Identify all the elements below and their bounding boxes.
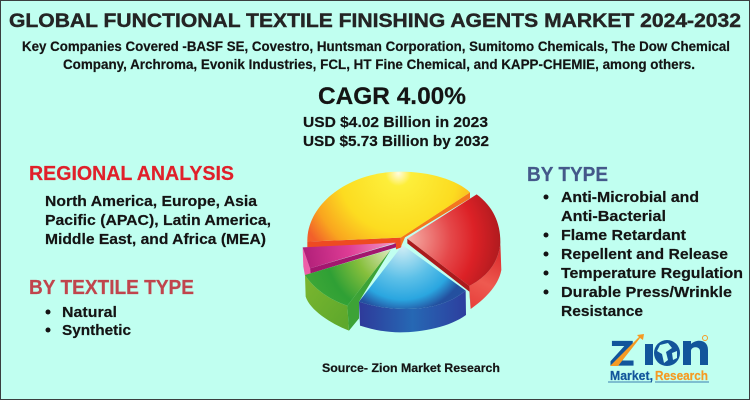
type list: Repellent and Release bbox=[561, 246, 728, 263]
pie slice: red bbox=[407, 194, 501, 309]
pie slice: green bbox=[305, 249, 391, 331]
type list: Anti-Bacterial bbox=[561, 208, 666, 225]
heading: by textile type: BY TEXTILE TYPE bbox=[29, 277, 194, 299]
pie slice: blue bbox=[359, 245, 466, 332]
regional analysis text: Middle East, and Africa (MEA) bbox=[45, 231, 266, 248]
3D pie chart bbox=[303, 172, 501, 332]
CAGR heading: CAGR 4.00% bbox=[318, 83, 466, 110]
pie slice: yellow bbox=[307, 172, 470, 249]
heading: by type: BY TYPE bbox=[527, 164, 608, 186]
market size figures: USD $5.73 Billion by 2032 bbox=[303, 134, 489, 150]
market size figures bbox=[303, 115, 489, 150]
logo: Zion Market Research: Z bbox=[610, 335, 634, 373]
type list: Resistance bbox=[561, 303, 643, 320]
key companies text: Key Companies Covered -BASF SE, Covestro, Huntsman Corporation, Sumitomo Chemicals, The Dow Chemical bbox=[22, 38, 730, 54]
textile type list: Natural bbox=[62, 304, 117, 321]
type list bbox=[544, 189, 743, 320]
key companies text: Company, Archroma, Evonik Industries, FCL, HT Fine Chemical, and KAPP-CHEMIE, among others. bbox=[63, 56, 695, 72]
title: GLOBAL FUNCTIONAL TEXTILE FINISHING AGENTS MARKET 2024-2032 bbox=[9, 10, 741, 32]
key companies text bbox=[22, 38, 730, 72]
type list: Flame Retardant bbox=[561, 227, 686, 244]
regional analysis text bbox=[45, 193, 271, 248]
logo: Zion Market Research bbox=[608, 334, 709, 383]
heading: regional analysis: REGIONAL ANALYSIS bbox=[29, 163, 234, 185]
type list: Anti-Microbial and bbox=[561, 189, 699, 206]
type list: Temperature Regulation bbox=[561, 265, 743, 282]
type list: Durable Press/Wrinkle bbox=[561, 284, 732, 301]
textile type list bbox=[46, 304, 131, 339]
logo: Zion Market Research: Research bbox=[655, 369, 708, 383]
textile type list: Synthetic bbox=[62, 322, 131, 339]
regional analysis text: North America, Europe, Asia bbox=[45, 193, 258, 210]
market size figures: USD $4.02 Billion in 2023 bbox=[303, 115, 488, 131]
logo: Zion Market Research: Market, bbox=[610, 369, 653, 383]
regional analysis text: Pacific (APAC), Latin America, bbox=[45, 212, 271, 229]
source note: Source- Zion Market Research bbox=[322, 361, 500, 375]
logo arrow bbox=[610, 334, 644, 366]
pie slice: pink bbox=[303, 243, 396, 276]
